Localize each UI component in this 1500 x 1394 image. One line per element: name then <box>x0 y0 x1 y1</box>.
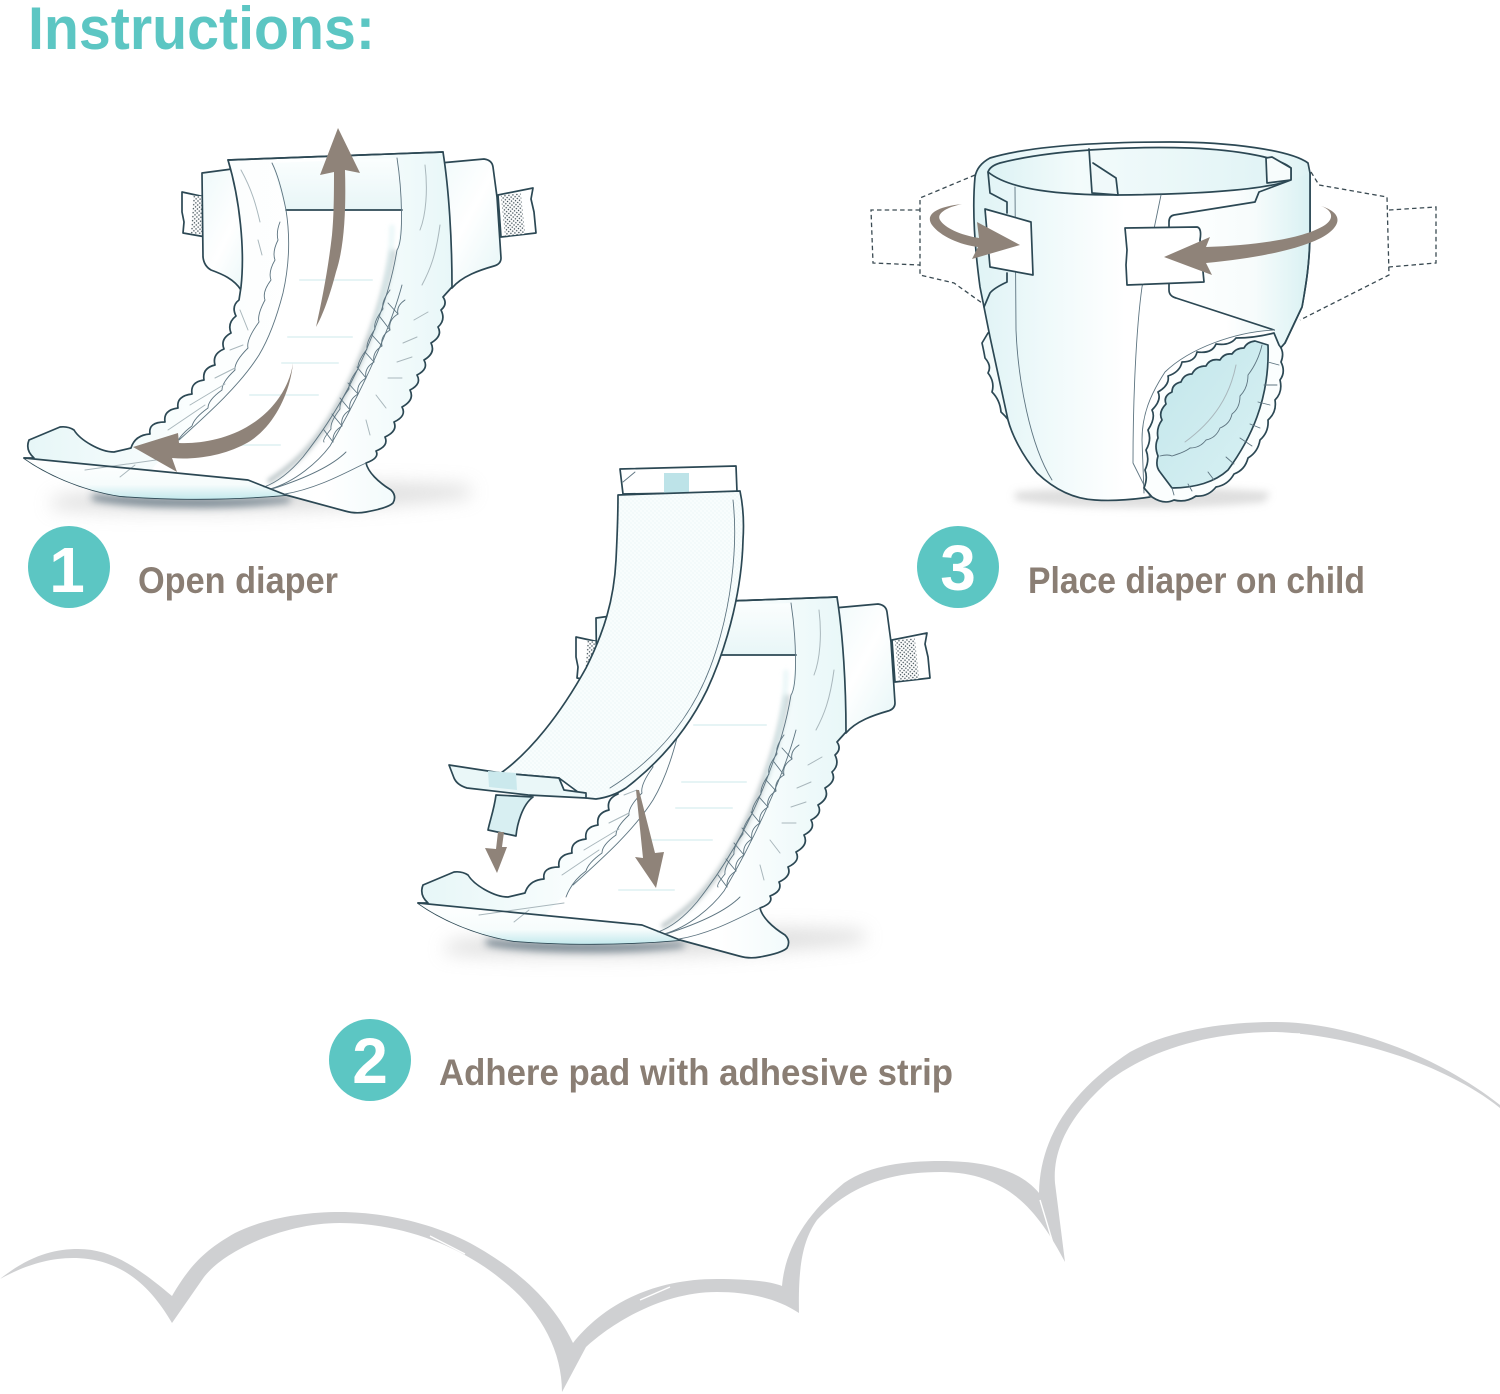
decorative cloud brush outline <box>0 1022 1500 1392</box>
illustration: diaper under pad <box>418 597 930 958</box>
step number 2: 2 <box>352 1025 388 1097</box>
step number 3: 3 <box>940 532 976 604</box>
illustration: booster pad <box>449 466 744 836</box>
arrow: large down <box>635 790 664 888</box>
label: open diaper: Open diaper <box>138 560 338 601</box>
step number 1 <box>28 526 110 608</box>
arrow: small down <box>485 832 507 873</box>
step number 3 <box>917 526 999 608</box>
step number 1: 1 <box>49 534 85 606</box>
step number 2 <box>329 1019 411 1101</box>
arrow: up <box>316 128 360 327</box>
panel: step 1 open diaper <box>24 128 536 608</box>
illustration: open diaper <box>24 152 536 513</box>
label: adhere pad: Adhere pad with adhesive strip <box>439 1052 953 1093</box>
panel: step 3 place on child <box>871 142 1436 608</box>
label: place on child: Place diaper on child <box>1028 560 1365 601</box>
illustration: closed diaper <box>871 142 1436 508</box>
arrow: wrap left tab <box>930 204 1020 259</box>
arrow: curving down left <box>133 363 293 472</box>
panel: step 2 adhere pad <box>329 466 953 1101</box>
arrow: wrap right tab <box>1164 206 1337 275</box>
